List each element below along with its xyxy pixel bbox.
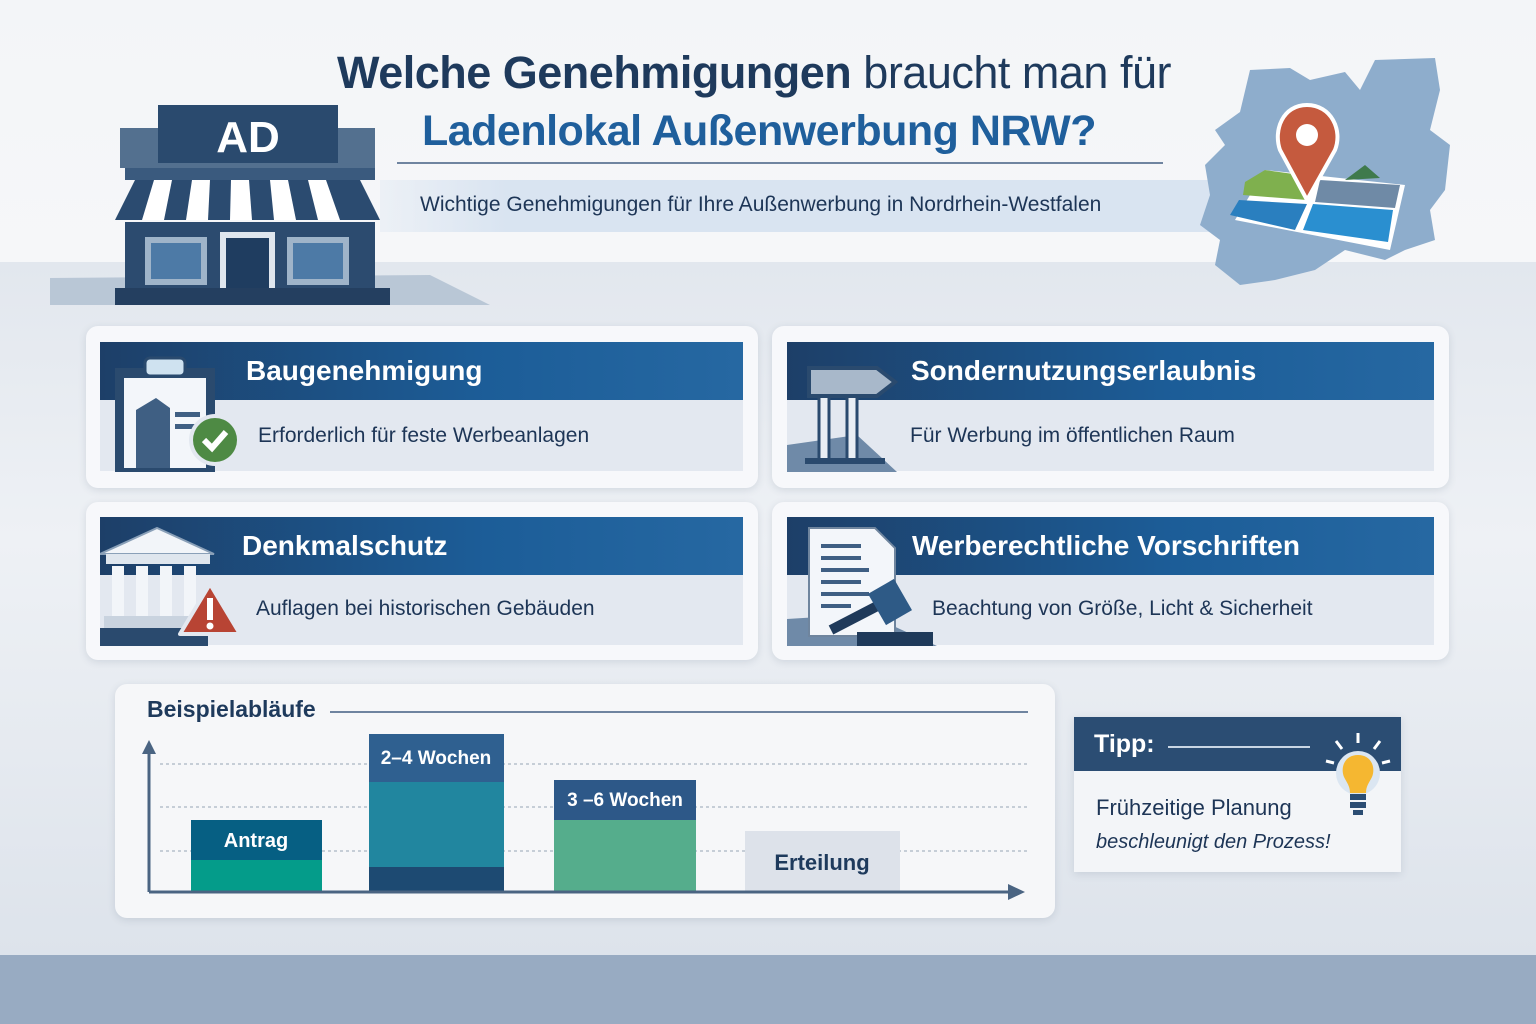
panel: Sondernutzungserlaubnis: Sondernutzungserlaubnis <box>911 355 1256 386</box>
title: Ladenlokal Außenwerbung NRW? <box>422 107 1096 155</box>
panel: Sondernutzungserlaubnis <box>772 326 1449 488</box>
subtitle band: Wichtige Genehmigungen für Ihre Außenwerbung in Nordrhein-Westfalen <box>420 193 1101 216</box>
bar chart: 2–4 Wochen <box>381 748 491 769</box>
panel: Werberechtliche Vorschriften: Werberechtliche Vorschriften <box>912 530 1300 561</box>
background top <box>0 0 1536 262</box>
panel: Sondernutzungserlaubnis: Für Werbung im öffentlichen Raum <box>910 424 1235 447</box>
callout: Tipp: Frühzeitige Planung <box>1096 795 1292 820</box>
icon: temple with warning <box>100 527 236 646</box>
panel: Werberechtliche Vorschriften: Beachtung von Größe, Licht & Sicherheit <box>932 597 1313 620</box>
icon: storefront: AD <box>216 113 280 162</box>
icon: signpost <box>787 366 898 472</box>
callout: Tipp <box>1074 717 1401 872</box>
panel: Baugenehmigung <box>86 326 758 488</box>
panel: Denkmalschutz: Auflagen bei historischen Gebäuden <box>256 597 595 620</box>
panel: Werberechtliche Vorschriften <box>772 502 1449 660</box>
bar chart <box>142 734 1027 900</box>
panel: Denkmalschutz <box>86 502 758 660</box>
bar chart: 3 –6 Wochen <box>567 790 683 811</box>
subtitle band <box>380 180 1220 232</box>
bar chart: Erteilung <box>774 850 870 875</box>
panel: chart Beispielabläufe <box>115 684 1055 918</box>
title: Welche Genehmigungen braucht man für <box>337 47 1171 98</box>
bar chart: Antrag <box>224 830 288 852</box>
panel: Baugenehmigung: Baugenehmigung <box>246 355 482 386</box>
icon: light bulb <box>1326 733 1390 815</box>
icon: document with gavel <box>787 527 937 646</box>
panel: Baugenehmigung: Erforderlich für feste Werbeanlagen <box>258 424 589 447</box>
callout: Tipp: beschleunigt den Prozess! <box>1096 831 1331 853</box>
callout: Tipp: Tipp: <box>1094 730 1155 758</box>
panel: Denkmalschutz: Denkmalschutz <box>242 530 447 561</box>
icon: clipboard with check <box>115 356 237 472</box>
icon: NRW map with pin <box>1200 58 1450 285</box>
title <box>337 47 1171 155</box>
icon: storefront <box>50 105 490 305</box>
background bottom band <box>0 955 1536 1024</box>
heading: Beispielabläufe: Beispielabläufe <box>147 696 316 722</box>
